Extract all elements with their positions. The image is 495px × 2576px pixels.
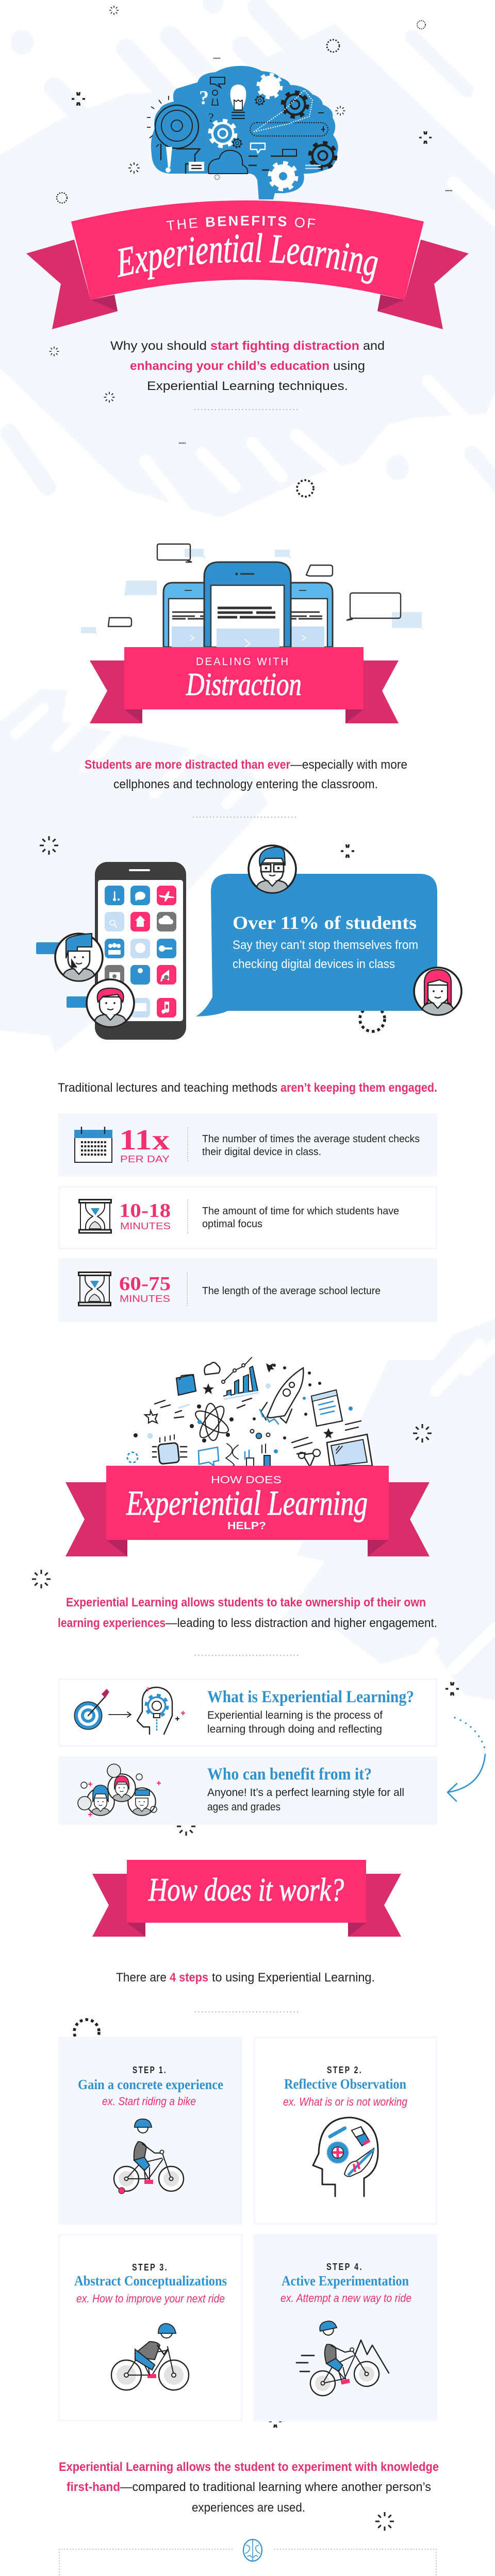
panel heading: Who can benefit from it?	[207, 1765, 372, 1784]
step title: Reflective Observation	[284, 2076, 406, 2092]
paragraph: experiential learning allows ownership: —leading to less distraction and higher engagement.	[166, 1616, 437, 1630]
paragraph: traditional lectures: aren’t keeping them engaged.	[280, 1081, 437, 1095]
paragraph: four steps	[116, 1971, 375, 1985]
icon: head with bike parts	[313, 2117, 378, 2196]
ribbon: how does it work	[92, 1860, 401, 1937]
ribbon text: help: HELP?	[227, 1520, 266, 1532]
student face left with bubble	[36, 934, 103, 981]
paragraph: experiment with knowledge first-hand: —compared to traditional learning where another person’s	[120, 2480, 431, 2494]
hero ribbon	[26, 200, 469, 329]
arrow: curved from what to who	[448, 1718, 485, 1801]
paragraph: experiment with knowledge first-hand	[59, 2460, 439, 2515]
ribbon script: distraction: Distraction	[186, 667, 302, 702]
paragraph: experiment with knowledge first-hand: first-hand	[67, 2480, 120, 2494]
icon: brain	[147, 66, 338, 199]
step title: Active Experimentation	[282, 2273, 409, 2289]
step card 1	[58, 2037, 242, 2225]
panel: what is experiential learning: learning through doing and reflecting	[207, 1723, 382, 1735]
stat card: 60-75 minutes	[58, 1258, 437, 1322]
stat card: 11x per day: their digital device in class.	[202, 1146, 321, 1158]
ribbon text: how does: HOW DOES	[211, 1475, 282, 1486]
stat unit: MINUTES	[120, 1294, 170, 1304]
icon cluster: science and technology	[127, 1358, 372, 1466]
icon: brain: ?	[208, 111, 214, 125]
background: hero diagonal band	[0, 3, 495, 526]
subtitle: Why you should	[110, 339, 207, 353]
paragraph: students more distracted: —especially with more	[290, 758, 407, 772]
stat description: The length of the average school lecture	[202, 1285, 381, 1297]
paragraph: four steps: 4 steps	[170, 1971, 208, 1985]
ribbon: dealing with distraction	[90, 647, 399, 723]
stat card: 10-18 minutes: optimal focus	[202, 1218, 262, 1230]
subtitle: enhancing your child’s education	[130, 359, 329, 373]
paragraph: experiment with knowledge first-hand: Experiential Learning allows the student to experiment with knowledge	[59, 2460, 439, 2474]
paragraph: four steps: to using Experiential Learning.	[212, 1971, 375, 1985]
step card 4	[254, 2234, 437, 2421]
step title: Gain a concrete experience	[78, 2077, 223, 2092]
icon: cyclist leaning	[111, 2324, 189, 2390]
step card 2	[255, 2037, 436, 2224]
paragraph: traditional lectures: Traditional lectures and teaching methods	[58, 1081, 277, 1095]
paragraph: experiment with knowledge first-hand: experiences are used.	[192, 2501, 305, 2515]
stat description: Say they can’t stop themselves from	[233, 938, 418, 952]
stat card: 11x per day	[58, 1113, 437, 1177]
paragraph: experiential learning allows ownership: Experiential Learning allows students to take ownership of their own	[66, 1596, 426, 1609]
step example: ex. How to improve your next ride	[76, 2292, 225, 2305]
subtitle: using	[333, 359, 365, 373]
paragraph: students more distracted: Students are more distracted than ever	[85, 758, 290, 772]
speech bubble: over 11% of students	[196, 845, 461, 1016]
ribbon script: experiential learning: Experiential Learning	[126, 1483, 368, 1522]
paragraph: experiential learning allows ownership: learning experiences	[58, 1616, 166, 1630]
step example: ex. What is or is not working	[283, 2095, 408, 2108]
icon: cyclist upright	[114, 2119, 184, 2194]
paragraph: students more distracted	[85, 758, 407, 791]
background: right band	[281, 1319, 495, 1700]
panel body: Experiential learning is the process of	[207, 1709, 383, 1721]
stat card: 10-18 minutes	[59, 1187, 436, 1249]
stat unit: MINUTES	[120, 1221, 171, 1231]
step example: ex. Start riding a bike	[102, 2095, 196, 2108]
speech bubble: over 11% of students: checking digital devices in class	[233, 957, 395, 971]
student face lower with bubble	[67, 979, 134, 1027]
icon: hourglass	[78, 1273, 110, 1306]
panel body: Anyone! It’s a perfect learning style for all	[207, 1787, 404, 1799]
stat number: 10-18	[119, 1200, 171, 1222]
icon: brain outline	[243, 2539, 262, 2561]
step example: ex. Attempt a new way to ride	[280, 2292, 411, 2304]
step label: STEP 2.	[327, 2065, 362, 2075]
panel: what is experiential learning	[59, 1680, 436, 1745]
stat description: The amount of time for which students have	[202, 1206, 399, 1217]
paragraph: experiential learning allows ownership	[58, 1596, 437, 1630]
icon: cyclist uphill	[296, 2313, 389, 2398]
stat description: The number of times the average student checks	[202, 1133, 420, 1145]
subtitle: start fighting distraction	[210, 339, 359, 353]
subtitle: and	[363, 339, 385, 353]
icon: hourglass	[79, 1199, 111, 1233]
icon: group of people	[78, 1764, 161, 1817]
stat unit: PER DAY	[120, 1154, 170, 1164]
paragraph: four steps: There are	[116, 1971, 167, 1985]
stat number: 60-75	[119, 1273, 171, 1295]
step label: STEP 3.	[132, 2262, 168, 2273]
ribbon text: dealing with: DEALING WITH	[196, 656, 290, 668]
icon: target to lightbulb head	[75, 1687, 185, 1734]
icon: three phones with speech bubbles	[81, 544, 424, 647]
panel: who can benefit: ages and grades	[207, 1801, 280, 1813]
title line: experiential learning: Experiential Learning	[118, 233, 378, 284]
background: left mid band	[0, 689, 268, 1053]
stat number: 11x	[119, 1124, 170, 1156]
icon: calendar	[74, 1127, 112, 1162]
smartphone with app icons	[95, 862, 186, 1040]
step label: STEP 1.	[133, 2065, 167, 2075]
panel heading: What is Experiential Learning?	[207, 1688, 414, 1706]
stat headline: Over 11% of students	[233, 912, 417, 933]
title line: the benefits of: THE BENEFITS OF	[166, 215, 316, 230]
step label: STEP 4.	[326, 2262, 363, 2272]
step title: Abstract Conceptualizations	[74, 2273, 227, 2289]
step card 3	[59, 2235, 241, 2420]
ribbon script: How does it work?	[148, 1871, 344, 1908]
subtitle: Experiential Learning techniques.	[147, 379, 348, 393]
ribbon: how does experiential learning help	[65, 1466, 430, 1556]
icon: brain: ?	[199, 87, 209, 109]
panel: who can benefit	[58, 1756, 437, 1825]
paragraph: traditional lectures	[58, 1081, 437, 1095]
callout: retention statistic	[59, 2539, 436, 2576]
subtitle	[110, 339, 385, 393]
paragraph: students more distracted: cellphones and technology entering the classroom.	[113, 777, 378, 791]
